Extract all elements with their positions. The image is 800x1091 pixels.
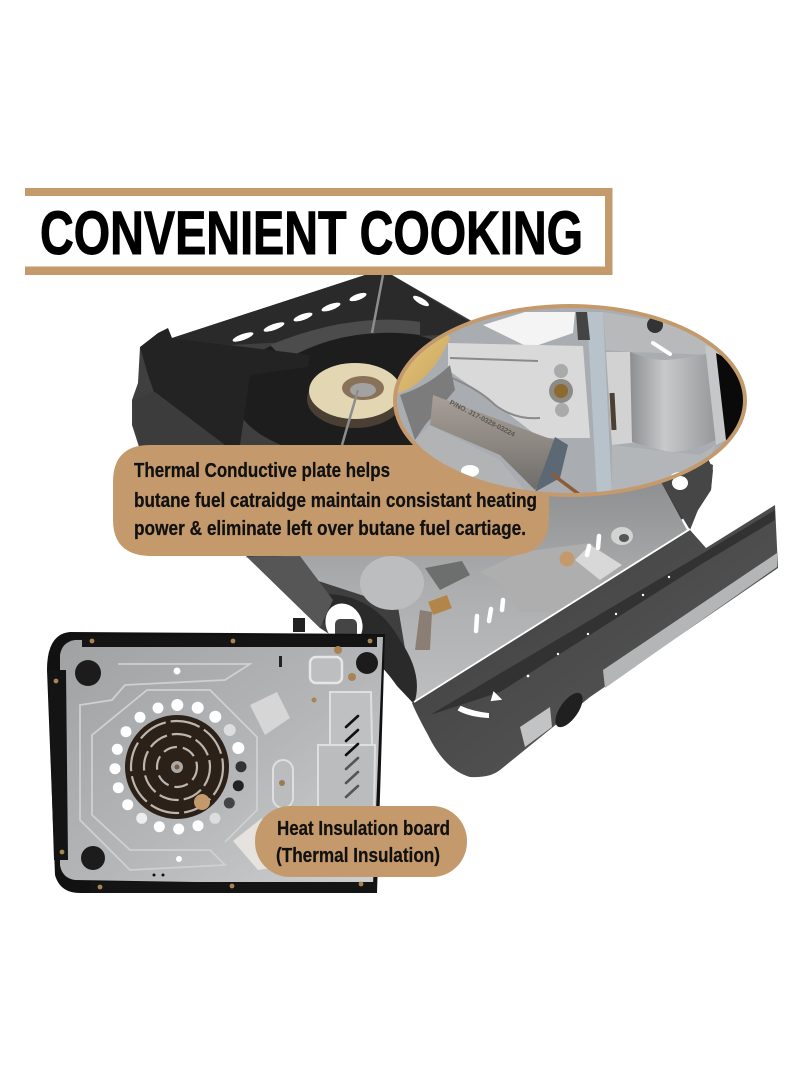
stove rear body <box>132 275 713 680</box>
brass nozzle <box>428 595 452 615</box>
left windshield wing <box>140 328 310 445</box>
rounded control housing <box>312 594 417 704</box>
spring <box>612 393 614 430</box>
plate ridge <box>450 358 540 418</box>
grille openings <box>131 721 223 813</box>
white wall edge <box>414 529 690 702</box>
tube engraving: P/NO. J17-0328-03224 <box>448 400 516 439</box>
silver base tray <box>245 480 687 702</box>
callout bubble: heat insulation board <box>255 806 467 877</box>
inset frame <box>393 304 747 497</box>
side gas fitting <box>415 610 432 650</box>
grate slots <box>232 291 430 344</box>
center panel <box>606 352 634 445</box>
inset photo <box>393 304 750 497</box>
white insulation corner <box>233 818 272 870</box>
outer black frame <box>47 632 385 893</box>
rubber foot top left <box>75 660 101 686</box>
burner ring <box>342 376 384 400</box>
top knob stub <box>293 618 305 632</box>
gas knob <box>335 619 357 641</box>
bright mounting plate <box>448 343 590 438</box>
regulator dome <box>360 556 424 610</box>
upper slot <box>653 343 670 354</box>
pointer dot on thermal plate <box>560 552 574 566</box>
title banner <box>25 188 612 275</box>
cooking bowl <box>233 327 483 459</box>
title text: CONVENIENT COOKING <box>40 199 583 267</box>
magnified circular inset of burner tube and plate <box>393 304 750 497</box>
darker wall fold <box>430 510 775 715</box>
upper raised channel <box>330 692 372 745</box>
grey housing side <box>247 556 333 628</box>
tube connector <box>535 437 568 492</box>
wall dots <box>527 576 670 677</box>
bubble text: Thermal Conductive plate helps <box>134 459 390 482</box>
thermal conductive plate <box>480 543 622 613</box>
lower right panel <box>612 445 716 490</box>
rubber foot top right <box>356 652 378 674</box>
black background right <box>716 353 743 440</box>
burner centre <box>350 383 376 397</box>
callout bubble: thermal conductive plate <box>113 445 549 556</box>
burner grille <box>125 715 229 819</box>
bubble shape <box>113 445 549 556</box>
valve bracket <box>425 561 470 590</box>
stove: main photo, opened case seen from above <box>132 275 778 777</box>
bubble text: butane fuel catraidge maintain consistant heating <box>134 489 537 512</box>
keyhole slot <box>279 656 282 667</box>
cartridge hole <box>550 688 588 732</box>
rail shadow <box>576 312 590 340</box>
lower raised channel <box>318 745 375 810</box>
mount rivet <box>279 780 285 786</box>
pointer dot on heat insulation <box>194 794 210 810</box>
brass disc <box>398 335 450 394</box>
grille hub centre <box>174 764 180 770</box>
bottom black bar <box>90 882 377 893</box>
wall slot <box>459 693 500 717</box>
bubble text: Heat Insulation board <box>277 817 450 840</box>
vent slots <box>346 716 358 797</box>
square embossed recess <box>310 657 342 683</box>
lower casting <box>415 425 524 490</box>
left black bar <box>48 670 68 860</box>
burner tube <box>430 395 565 490</box>
grille disc <box>125 715 229 819</box>
bubble shape <box>255 806 467 877</box>
right rear dark plate <box>660 455 713 530</box>
oval embossed mount <box>273 760 293 808</box>
bubble text <box>134 459 537 540</box>
silver bottom plate <box>60 637 383 885</box>
grate top plate <box>172 275 470 345</box>
front wall <box>412 505 778 777</box>
curved heat shield <box>630 352 716 452</box>
inset base <box>393 304 747 497</box>
side rail <box>705 345 726 445</box>
lower left white hole <box>461 465 479 477</box>
tray dimple centre <box>619 534 629 542</box>
small dots <box>152 874 164 876</box>
tab louver <box>250 692 290 735</box>
bubble text: (Thermal Insulation) <box>276 844 440 867</box>
small label <box>520 707 552 747</box>
lower white hole <box>670 472 680 476</box>
plate holes <box>110 668 246 862</box>
vertical rail <box>587 312 612 497</box>
bubble text <box>276 817 450 867</box>
lower body band <box>132 392 225 450</box>
embossed outer contour <box>80 664 257 870</box>
plate screws <box>554 364 568 378</box>
stove underside photo <box>47 618 385 893</box>
burner rim <box>307 370 403 428</box>
top black bar <box>82 636 377 647</box>
bar screws <box>54 639 372 889</box>
plate highlight <box>575 545 622 580</box>
long product label <box>603 553 777 688</box>
grille hub <box>171 761 183 773</box>
tray dimple <box>611 527 633 545</box>
top hole <box>647 317 663 333</box>
burner cap <box>309 363 401 419</box>
white gap <box>483 312 575 348</box>
knob opening <box>319 597 369 651</box>
upper panel <box>603 312 716 355</box>
burner body <box>400 365 455 440</box>
bubble text: power & eliminate left over butane fuel cartiage. <box>134 517 526 540</box>
pot support wires <box>342 275 383 445</box>
rear plate hole <box>672 476 688 490</box>
tray slots <box>476 536 599 631</box>
rubber foot bottom left <box>81 846 105 870</box>
banner frame <box>25 188 612 275</box>
bowl highlight <box>270 320 420 360</box>
copper wire <box>552 474 580 495</box>
